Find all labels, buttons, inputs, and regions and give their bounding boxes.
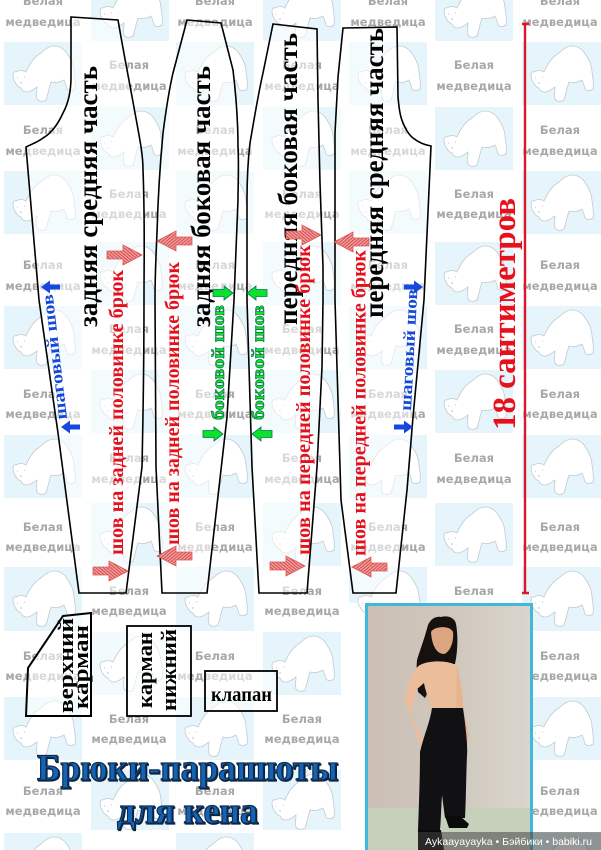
ruler line: 18 cm: [522, 24, 529, 593]
background watermark tiles: Белая: [282, 187, 322, 201]
background watermark tiles: медведица: [5, 804, 81, 818]
seam label: front half 1: шов на передней половинке брюк: [293, 245, 315, 555]
inseam label left: шаговый шов: [38, 293, 71, 421]
background watermark tiles: медведица: [350, 279, 426, 293]
green side seam arrows: [203, 286, 272, 441]
background watermark tiles: Белая: [195, 258, 235, 272]
background watermark tiles: Белая: [282, 58, 322, 72]
panel: back side pattern piece: [155, 20, 238, 593]
background watermark tiles: медведица: [522, 144, 598, 158]
background watermark tiles: Белая: [23, 784, 63, 798]
lower pocket piece: нижний: [156, 629, 181, 711]
background watermark tiles: медведица: [522, 540, 598, 554]
background watermark tiles: Белая: [368, 520, 408, 534]
background watermark tiles: Белая: [368, 123, 408, 137]
background watermark tiles: Белая: [195, 649, 235, 663]
background watermark tiles: Белая: [368, 387, 408, 401]
background watermark tiles: медведица: [91, 472, 167, 486]
background watermark tiles: медведица: [436, 472, 512, 486]
background watermark tiles: медведица: [522, 279, 598, 293]
background watermark tiles: медведица: [91, 343, 167, 357]
blue inseam arrows: [41, 280, 423, 434]
title: [37, 748, 338, 832]
background watermark tiles: Белая: [195, 123, 235, 137]
background watermark tiles: медведица: [5, 144, 81, 158]
background watermark tiles: Белая: [109, 584, 149, 598]
title: для кена: [117, 791, 258, 832]
background watermark tiles: Белая: [540, 387, 580, 401]
background watermark tiles: медведица: [350, 144, 426, 158]
seam label: back half 1: шов на задней половинке брюк: [106, 270, 128, 555]
upper pocket piece: [26, 613, 93, 716]
seam label: back half 2: шов на задней половинке брюк: [162, 262, 184, 545]
background watermark tiles: Белая: [23, 258, 63, 272]
title: Брюки-парашюты: [37, 748, 338, 789]
background watermark tiles: медведица: [522, 669, 598, 683]
background watermark tiles: Белая: [109, 58, 149, 72]
background watermark tiles: Белая: [23, 123, 63, 137]
background watermark tiles: Белая: [195, 784, 235, 798]
upper pocket piece: карман: [68, 625, 93, 709]
watermark bar: [418, 832, 601, 850]
background watermark tiles: медведица: [91, 732, 167, 746]
background watermark tiles: Белая: [454, 58, 494, 72]
background watermark tiles: Белая: [23, 387, 63, 401]
label: front side part: передняя боковая часть: [273, 33, 303, 325]
background watermark tiles: Белая: [540, 123, 580, 137]
flap piece: [205, 671, 277, 711]
background watermark tiles: Белая: [23, 520, 63, 534]
background watermark tiles: медведица: [177, 144, 253, 158]
background watermark tiles: медведица: [5, 669, 81, 683]
seam label: front half 2: шов на передней половинке брюк: [348, 250, 370, 556]
background watermark tiles: Белая: [540, 784, 580, 798]
red seam arrows: [93, 225, 387, 581]
background watermark tiles: медведица: [177, 540, 253, 554]
background watermark tiles: медведица: [522, 804, 598, 818]
background watermark tiles: медведица: [522, 407, 598, 421]
background watermark tiles: медведица: [264, 732, 340, 746]
background watermark tiles: медведица: [264, 79, 340, 93]
background watermark tiles: медведица: [5, 279, 81, 293]
background watermark tiles: медведица: [264, 207, 340, 221]
background watermark tiles: Белая: [109, 187, 149, 201]
background watermark tiles: Белая: [454, 322, 494, 336]
background watermark tiles: медведица: [350, 540, 426, 554]
background watermark tiles: Белая: [109, 322, 149, 336]
background watermark tiles: медведица: [91, 207, 167, 221]
background watermark tiles: Белая: [195, 520, 235, 534]
inseam label right: шаговый шов: [396, 288, 421, 411]
background watermark tiles: медведица: [350, 15, 426, 29]
background watermark tiles: медведица: [264, 472, 340, 486]
background watermark tiles: Белая: [540, 520, 580, 534]
background watermark tiles: Белая: [282, 322, 322, 336]
background watermark tiles: Белая: [282, 712, 322, 726]
background watermark tiles: медведица: [264, 604, 340, 618]
background watermark tiles: медведица: [436, 79, 512, 93]
panel: front middle pattern piece: [335, 27, 431, 593]
background watermark tiles: медведица: [5, 407, 81, 421]
background watermark tiles: Белая: [454, 187, 494, 201]
background watermark tiles: медведица: [5, 540, 81, 554]
background watermark tiles: Белая: [540, 258, 580, 272]
background watermark tiles: Белая: [109, 712, 149, 726]
background watermark tiles: Белая: [454, 451, 494, 465]
background watermark tiles: медведица: [436, 343, 512, 357]
background watermark tiles: медведица: [436, 207, 512, 221]
background watermark tiles: Белая: [195, 387, 235, 401]
panel: back middle pattern piece: [26, 17, 144, 593]
background watermark tiles: Белая: [454, 584, 494, 598]
background watermark tiles: Белая: [368, 258, 408, 272]
side seam label right: боковой шов: [248, 305, 268, 420]
label: front middle part: передняя средняя часть: [359, 28, 389, 318]
flap piece: клапан: [211, 682, 272, 706]
lower pocket piece: карман: [132, 632, 157, 708]
background watermark tiles: медведица: [522, 15, 598, 29]
background watermark tiles: Белая: [540, 649, 580, 663]
label: back side part: задняя боковая часть: [186, 66, 216, 327]
background watermark tiles: медведица: [350, 407, 426, 421]
lower pocket piece: [127, 626, 191, 716]
background watermark tiles: медведица: [91, 79, 167, 93]
photo of doll: [365, 603, 533, 850]
background watermark tiles: медведица: [177, 407, 253, 421]
watermark bar: Aykaayayayka • Бэйбики • babiki.ru: [425, 836, 592, 848]
background watermark tiles: Белая: [109, 451, 149, 465]
background watermark tiles: Белая: [282, 584, 322, 598]
background watermark tiles: медведица: [91, 604, 167, 618]
background watermark tiles: Белая: [282, 451, 322, 465]
side seam label left: боковой шов: [208, 305, 228, 420]
background watermark tiles: медведица: [177, 15, 253, 29]
background watermark tiles: Белая: [23, 649, 63, 663]
background watermark tiles: медведица: [177, 669, 253, 683]
background watermark tiles: медведица: [264, 343, 340, 357]
label: back middle part: задняя средняя часть: [73, 66, 103, 327]
background watermark tiles: медведица: [5, 15, 81, 29]
background watermark tiles: медведица: [177, 279, 253, 293]
panel: front side pattern piece: [247, 24, 323, 593]
background watermark tiles: медведица: [177, 804, 253, 818]
upper pocket piece: верхний: [53, 618, 78, 713]
ruler label: 18 сантиметров: [487, 198, 523, 430]
